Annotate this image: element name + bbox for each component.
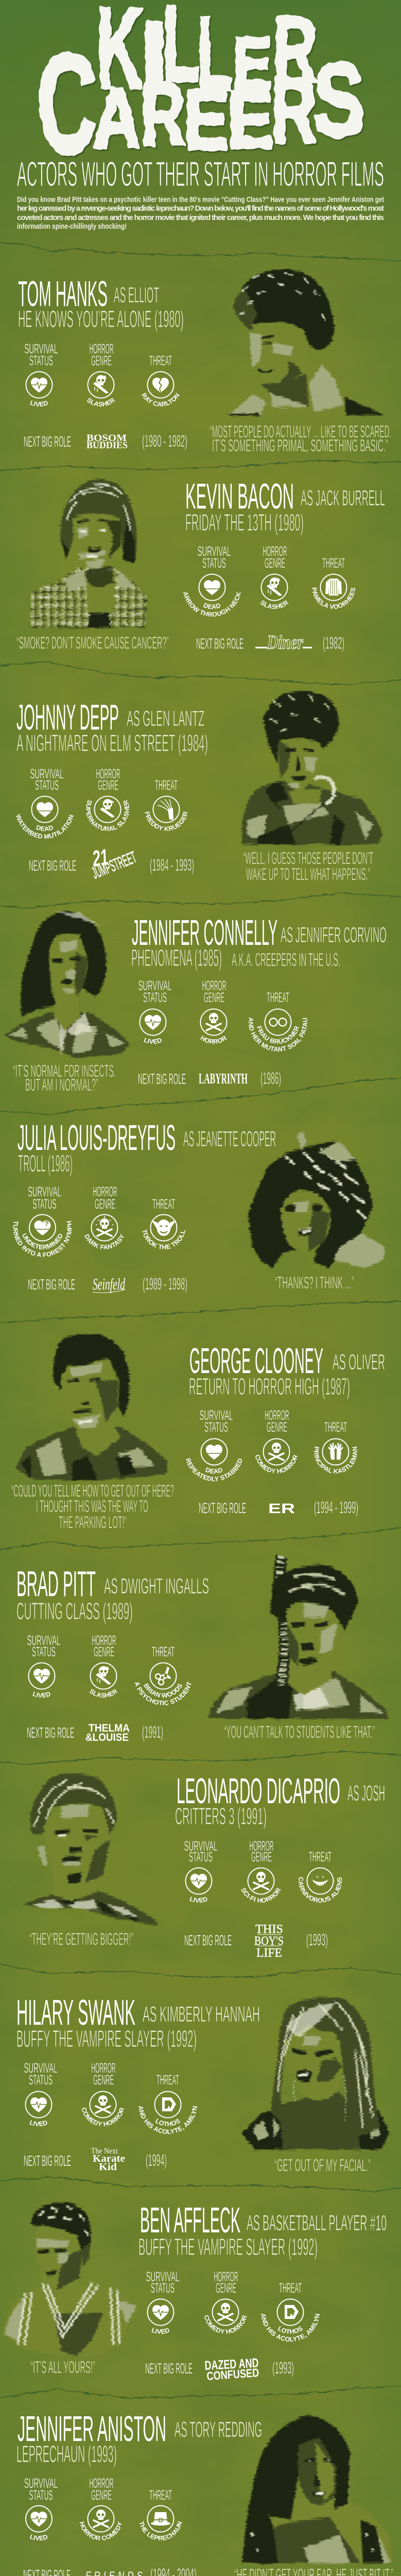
panel: Brad Pitt: [16, 1556, 388, 1743]
panel: Tom Hanks: [18, 269, 391, 455]
stat: threat: LOTHOS: [276, 2325, 304, 2335]
portrait: Kevin Bacon: [31, 479, 147, 628]
portrait: Leonardo DiCaprio: [22, 1773, 159, 1925]
panel: Ben Affleck: “IT’S ALL YOURS!”: [30, 2358, 95, 2377]
stat: horror genre: [202, 2269, 249, 2335]
stat: threat: THREAT: [149, 2487, 172, 2503]
next big role: DAZED AND: [204, 2356, 259, 2373]
stat: survival status: TURNED INTO A FOREST NYMPH: [13, 1221, 72, 1257]
stat: horror genre: HORROR: [93, 1184, 117, 1199]
stat: threat: A PSYCHOTIC STUDENT: [133, 1681, 194, 1707]
icon: hands: [322, 1438, 349, 1465]
stat: survival status: STATUS: [143, 990, 167, 1005]
stat: threat: CARNIVOROUS ALIENS: [297, 1876, 343, 1904]
stat: threat: [133, 1644, 194, 1707]
quote: [13, 1061, 116, 1094]
stat: threat: [137, 2487, 184, 2542]
stat: horror genre: HORROR: [214, 2269, 238, 2284]
next big role: [28, 1275, 187, 1293]
stat: horror genre: [85, 341, 116, 408]
next big role: [27, 1722, 163, 1743]
stat: horror genre: GENRE: [95, 1196, 115, 1212]
icon: skull and crossbones: [212, 2299, 239, 2326]
stat: threat: AND HER MUTANT SON, PATAU: [248, 1017, 308, 1052]
stat: survival status: SURVIVAL: [200, 1408, 233, 1423]
stat: survival status: STATUS: [29, 2487, 53, 2503]
stat: threat: [297, 1849, 343, 1904]
title: Killer Careers: E: [233, 22, 273, 106]
title: Killer Careers: I: [141, 4, 167, 100]
stat: horror genre: GENRE: [216, 2280, 236, 2296]
panel: Jennifer Connelly: HORROR: [202, 978, 226, 993]
icon: heart with pulse: [29, 1663, 55, 1689]
next big role: NEXT BIG ROLE: [138, 1071, 186, 1088]
panel: Tom Hanks: TOM HANKS: [18, 274, 108, 314]
panel: Julia Louis-Dreyfus: TROLL (1986): [18, 1150, 73, 1177]
next big role: [23, 2565, 197, 2576]
icon: bladed glove: [153, 796, 179, 822]
stat: threat: AND HIS ACOLYTE, AMILYN: [259, 2313, 321, 2343]
stat: horror genre: [80, 2060, 126, 2128]
next big role: LABYRINTH: [199, 1071, 248, 1087]
stat: survival status: SURVIVAL: [198, 544, 231, 559]
panel: Tom Hanks: AS ELLIOT: [114, 283, 159, 308]
stat: survival status: SURVIVAL: [30, 766, 64, 782]
title: Killer Careers: E: [184, 72, 229, 166]
panel: Johnny Depp: JOHNNY DEPP: [16, 697, 119, 737]
next big role: JUMPSTREET: [89, 848, 139, 882]
stat: survival status: WATERBED MUTILATION: [16, 814, 74, 839]
icon: heart with pulse: [140, 1009, 166, 1036]
stat: survival status: [184, 1408, 244, 1483]
panel: Leonardo DiCaprio: SURVIVAL: [184, 1838, 217, 1854]
panel: Brad Pitt: HORROR: [92, 1633, 116, 1648]
stat: threat: THREAT: [152, 1644, 175, 1659]
next big role: Diner: [267, 632, 304, 653]
stat: threat: [312, 1419, 359, 1475]
next big role: THELMA: [89, 1722, 130, 1734]
stat: threat: THREAT: [279, 2280, 302, 2296]
next big role: NEXT BIG ROLE: [24, 434, 71, 450]
stat: horror genre: SLASHER: [87, 398, 115, 407]
panel: Ben Affleck: BEN AFFLECK: [140, 2200, 240, 2240]
stat: survival status: LIVED: [150, 2327, 171, 2335]
panel: Jennifer Aniston: LEPRECHAUN (1993): [16, 2441, 117, 2467]
icon: skull and knife: [261, 574, 287, 601]
next big role: [29, 844, 194, 882]
title: Killer Careers: E: [228, 75, 273, 165]
stat: horror genre: DARK FANTASY: [83, 1233, 126, 1251]
stat: survival status: [146, 2269, 179, 2335]
panel: Brad Pitt: BRAD PITT: [16, 1564, 96, 1604]
icon: heart with pulse: [147, 2299, 174, 2326]
stat: horror genre: SLASHER: [88, 1687, 119, 1699]
panel: Tom Hanks: SURVIVAL: [25, 341, 58, 357]
next big role: LIFE: [256, 1946, 282, 1960]
icon: cracked heart: [201, 1438, 228, 1465]
panel: Kevin Bacon: HORROR: [263, 544, 287, 559]
panel: Jennifer Aniston: SURVIVAL: [24, 2476, 58, 2491]
next big role: Seinfeld: [93, 1275, 126, 1293]
stat: threat: [143, 777, 189, 833]
next big role: NEXT BIG ROLE: [196, 636, 243, 652]
panel: Brad Pitt: (1991): [142, 1723, 163, 1741]
stat: horror genre: SLASHER: [260, 601, 289, 609]
panel: Ben Affleck: SURVIVAL: [146, 2269, 179, 2284]
panel: Jennifer Connelly: (1986): [260, 1069, 281, 1088]
next big role: NEXT BIG ROLE: [24, 2153, 71, 2170]
next big role: Karate: [93, 2153, 125, 2164]
stat: horror genre: GENRE: [267, 1419, 287, 1435]
next big role: The Next: [91, 2147, 118, 2156]
stat: horror genre: SCI-FI HORROR: [239, 1887, 283, 1904]
next big role: [184, 1923, 328, 1960]
panel: Tom Hanks: HE KNOWS YOU’RE ALONE (1980): [18, 306, 184, 332]
title: Killer Careers: C: [37, 24, 97, 182]
stat: survival status: [11, 1184, 74, 1259]
panel: Johnny Depp: [14, 690, 382, 884]
panel: Jennifer Connelly: “IT’S NORMAL FOR INSECTS.: [13, 1061, 116, 1080]
icon: heart with question mark: [29, 1215, 56, 1241]
stat: threat: [310, 555, 357, 611]
stat: survival status: LIVED: [188, 1895, 209, 1904]
stat: survival status: STATUS: [202, 555, 226, 571]
stat: threat: [247, 990, 309, 1053]
stat: threat: THREAT: [322, 555, 345, 571]
stat: horror genre: HORROR: [96, 766, 120, 782]
stat: horror genre: GENRE: [94, 1644, 114, 1659]
stat: survival status: DEAD: [203, 603, 220, 609]
stat: horror genre: HORROR: [92, 2060, 115, 2076]
stat: horror genre: COMEDY HORROR: [80, 2107, 126, 2128]
next big role: [24, 2147, 167, 2173]
stat: threat: THREAT: [155, 777, 178, 793]
stat: threat: THREAT: [156, 2072, 179, 2088]
stat: survival status: LIVED: [28, 2119, 49, 2128]
stat: survival status: LIVED: [144, 1038, 162, 1044]
quote: BUT AM I NORMAL?”: [25, 1075, 98, 1094]
panel: Tom Hanks: HORROR: [90, 341, 113, 357]
stat: horror genre: [199, 978, 228, 1045]
panel: Leonardo DiCaprio: “THEY’RE GETTING BIGGER!”: [29, 1929, 133, 1948]
panel: Jennifer Connelly: SURVIVAL: [138, 978, 172, 993]
panel: Leonardo DiCaprio: CRITTERS 3 (1991): [175, 1803, 267, 1829]
portrait: Ben Affleck: [3, 2202, 138, 2356]
icon: leprechaun hat: [147, 2506, 174, 2532]
stat: survival status: STATUS: [32, 1644, 56, 1659]
stat: survival status: DEAD: [36, 825, 53, 832]
intro paragraph: [17, 195, 384, 231]
stat: survival status: LIVED: [29, 2533, 49, 2542]
icon: vampire fangs: [277, 2299, 304, 2326]
panel: Brad Pitt: CUTTING CLASS (1989): [16, 1598, 133, 1624]
icon: troll face: [150, 1215, 177, 1241]
quote: [210, 422, 391, 455]
next big role: ER: [268, 1501, 295, 1516]
quote: [11, 1481, 174, 1532]
stat: survival status: UNDETERMINED: [23, 1233, 62, 1250]
stat: horror genre: SUPERNATURAL SLASHER: [85, 800, 130, 832]
stat: threat: LOTHOS: [154, 2117, 182, 2128]
icon: broken heart: [147, 372, 174, 398]
icon: scissors: [150, 1663, 176, 1689]
stat: survival status: ARROW THROUGH NECK: [183, 591, 241, 617]
stat: survival status: DEAD: [204, 1466, 224, 1475]
portrait: Julia Louis-Dreyfus: [248, 1131, 385, 1268]
title: Killer Careers: R: [271, 58, 317, 161]
next big role: THIS: [255, 1923, 283, 1936]
stat: horror genre: GENRE: [91, 2487, 112, 2503]
stat: survival status: STATUS: [189, 1849, 213, 1865]
stat: horror genre: COMEDY HORROR: [202, 2314, 249, 2335]
portrait: Johnny Depp: [242, 690, 382, 844]
panel: Hilary Swank: HILARY SWANK: [16, 1992, 135, 2032]
panel: George Clooney: [11, 1334, 385, 1532]
panel: Kevin Bacon: (1982): [323, 634, 344, 652]
stat: survival status: STATUS: [204, 1419, 228, 1435]
stat: threat: [137, 2072, 199, 2136]
stat: horror genre: GENRE: [91, 353, 112, 368]
panel: Hilary Swank: SURVIVAL: [24, 2060, 58, 2076]
icon: skull and crossbones: [90, 2092, 116, 2117]
next big role: NEXT BIG ROLE: [27, 1725, 74, 1741]
stat: survival status: LIVED: [30, 400, 48, 406]
stat: threat: PRINCIPAL KASTLEMAN: [312, 1446, 359, 1475]
next big role: Kid: [99, 2161, 117, 2173]
stat: threat: THREAT: [309, 1849, 332, 1865]
icon: skull and knife: [95, 796, 120, 822]
panel: Jennifer Connelly: GENRE: [204, 990, 224, 1005]
panel: Hilary Swank: AS KIMBERLY HANNAH: [143, 2002, 260, 2027]
stat: survival status: [14, 766, 75, 840]
stat: horror genre: GENRE: [251, 1849, 272, 1865]
stat: survival status: [184, 1838, 217, 1904]
panel: Hilary Swank: [16, 1992, 390, 2175]
stat: threat: [141, 1196, 187, 1251]
next big role: BOSOM: [86, 433, 127, 444]
panel: Johnny Depp: AS GLEN LANTZ: [127, 706, 204, 731]
stat: survival status: STATUS: [35, 777, 59, 793]
stat: horror genre: GENRE: [265, 555, 285, 571]
icon: skull and knife: [91, 1663, 116, 1689]
stat: threat: RAY CARLTON: [142, 393, 180, 406]
next big role: NEXT BIG ROLE: [28, 1277, 75, 1293]
icon: heart with pulse: [185, 1868, 212, 1894]
panel: Johnny Depp: (1984 - 1993): [150, 856, 194, 874]
portrait: Tom Hanks: [228, 269, 386, 416]
panel: Jennifer Aniston: [16, 2409, 393, 2576]
next big role: BUDDIES: [86, 440, 128, 451]
stat: horror genre: COMEDY HORROR: [253, 1454, 300, 1475]
stat: survival status: STATUS: [29, 353, 53, 368]
next big role: [196, 632, 344, 653]
panel: Leonardo DiCaprio: [22, 1771, 385, 1960]
stat: survival status: STATUS: [151, 2280, 175, 2296]
next big role: NEXT BIG ROLE: [184, 1933, 232, 1949]
portrait: Hilary Swank: [241, 1997, 390, 2149]
panel: Julia Louis-Dreyfus: [11, 1117, 385, 1293]
stat: horror genre: HORROR: [265, 1408, 289, 1423]
intro paragraph: her leg caressed by a revenge-seeking sadistic leprechaun? Down below, you'll find the names of some of Hollywood's most: [17, 204, 384, 213]
stat: survival status: STATUS: [33, 1196, 57, 1212]
panel: Jennifer Aniston: AS TORY REDDING: [175, 2417, 262, 2442]
panel: Jennifer Connelly: [4, 912, 387, 1094]
title: Killer Careers: A: [93, 71, 141, 166]
stat: horror genre: HORROR: [249, 1838, 274, 1854]
icon: cracked heart: [199, 574, 225, 601]
intro paragraph: coveted actors and actresses and the horror movie that ignited their career, plus much more. We hope that you find this: [17, 213, 384, 222]
panel: Julia Louis-Dreyfus: (1989 - 1998): [143, 1275, 187, 1293]
next big role: [199, 1498, 358, 1517]
stat: threat: THREAT: [152, 1196, 175, 1212]
stat: horror genre: HORROR: [200, 1036, 227, 1044]
next big role: &LOUISE: [85, 1732, 129, 1743]
stat: threat: [140, 353, 181, 408]
panel: Kevin Bacon: “SMOKE? DON’T SMOKE CAUSE CANCER?”: [16, 633, 169, 652]
movie title: PHENOMENA (1985): [131, 944, 222, 971]
icon: vampire fangs: [154, 2092, 181, 2117]
icon: toothy grin: [307, 1868, 334, 1894]
stat: horror genre: HORROR COMEDY: [78, 2521, 124, 2542]
stat: threat: FRAU BRÜCKNER: [257, 1026, 300, 1044]
stat: survival status: [27, 1633, 61, 1699]
next big role: [24, 432, 187, 451]
icon: heart with pulse: [26, 2506, 52, 2532]
stat: survival status: [25, 341, 58, 408]
stat: threat: TOROK THE TROLL: [141, 1229, 187, 1251]
title: Killer Careers: S: [313, 43, 365, 158]
stat: horror genre: [259, 544, 290, 611]
stat: threat: PAMELA VOORHEES: [312, 587, 355, 609]
portrait: George Clooney: [15, 1334, 167, 1481]
panel: Ben Affleck: [3, 2200, 387, 2383]
stat: horror genre: [253, 1408, 300, 1475]
next big role: [145, 2356, 294, 2383]
stat: threat: THREAT: [149, 353, 172, 368]
icon: heart with pulse: [26, 372, 53, 398]
stat: threat: THREAT: [324, 1419, 347, 1435]
icon: skull with stars: [92, 1215, 117, 1241]
stat: survival status: [182, 544, 242, 618]
panel: Brad Pitt: SURVIVAL: [27, 1633, 61, 1648]
panel: Kevin Bacon: [16, 476, 385, 653]
panel: Jennifer Aniston: JENNIFER ANISTON: [18, 2409, 166, 2449]
title: Killer Careers: [37, 0, 365, 182]
stat: survival status: REPEATEDLY STABBED: [184, 1458, 244, 1483]
stat: survival status: SURVIVAL: [28, 1184, 61, 1199]
stat: horror genre: [78, 2476, 124, 2542]
next big role: 21: [91, 844, 110, 872]
icon: skull and crossbones: [201, 1009, 226, 1036]
stat: threat: BRIAN WOODS: [142, 1682, 184, 1699]
stat: survival status: [24, 2476, 58, 2542]
portrait: Brad Pitt: [208, 1556, 388, 1719]
panel: Brad Pitt: AS DWIGHT INGALLS: [104, 1574, 209, 1599]
next big role: NEXT BIG ROLE: [145, 2361, 193, 2377]
panel: George Clooney: I THOUGHT THIS WAS THE WAY TO: [36, 1497, 148, 1516]
icon: skull and knife: [88, 372, 114, 398]
title: Killer Careers: R: [141, 65, 185, 164]
stat: threat: [259, 2280, 321, 2343]
icon: cracked heart: [32, 796, 58, 822]
portrait: Jennifer Aniston: [242, 2415, 393, 2563]
stat: survival status: LIVED: [31, 1690, 52, 1699]
stat: survival status: STATUS: [29, 2072, 53, 2088]
stat: threat: THREAT: [267, 990, 289, 1005]
quote: [243, 849, 373, 884]
portrait: Jennifer Connelly: [4, 912, 130, 1058]
stat: horror genre: GENRE: [98, 777, 118, 793]
stat: horror genre: HORROR: [90, 2476, 113, 2491]
stat: horror genre: [83, 1184, 126, 1251]
panel: Ben Affleck: (1993): [272, 2359, 294, 2377]
stat: threat: FREDDY KRUEGER: [145, 811, 188, 831]
next big role: NEXT BIG ROLE: [199, 1500, 246, 1517]
stat: threat: THE LEPRECHAUN: [137, 2520, 184, 2542]
icon: skull and crossbones: [264, 1438, 289, 1465]
next big role: NEXT BIG ROLE: [29, 858, 76, 874]
stat: horror genre: [239, 1838, 283, 1904]
panel: Leonardo DiCaprio: (1993): [306, 1930, 328, 1949]
next big role: CONFUSED: [206, 2366, 259, 2383]
icon: skull and crossbones: [248, 1868, 274, 1894]
intro paragraph: information spine-chillingly shocking!: [17, 222, 127, 231]
stat: survival status: [24, 2060, 58, 2128]
quote: THE PARKING LOT!”: [59, 1513, 127, 1532]
panel: Hilary Swank: (1994): [146, 2151, 167, 2170]
icon: sweater: [320, 574, 347, 601]
stat: threat: AND HIS ACOLYTE, AMILYN: [137, 2105, 199, 2136]
stat: horror genre: GENRE: [93, 2072, 114, 2088]
stat: horror genre: [84, 766, 131, 833]
panel: Tom Hanks: (1980 - 1982): [142, 432, 187, 450]
next big role: BOY'S: [254, 1935, 284, 1948]
icon: skull and crossbones: [88, 2506, 114, 2532]
icon: heart with pulse: [26, 2092, 51, 2117]
icon: glasses: [265, 1009, 291, 1036]
stat: horror genre: [88, 1633, 119, 1699]
stat: survival status: [138, 978, 172, 1045]
